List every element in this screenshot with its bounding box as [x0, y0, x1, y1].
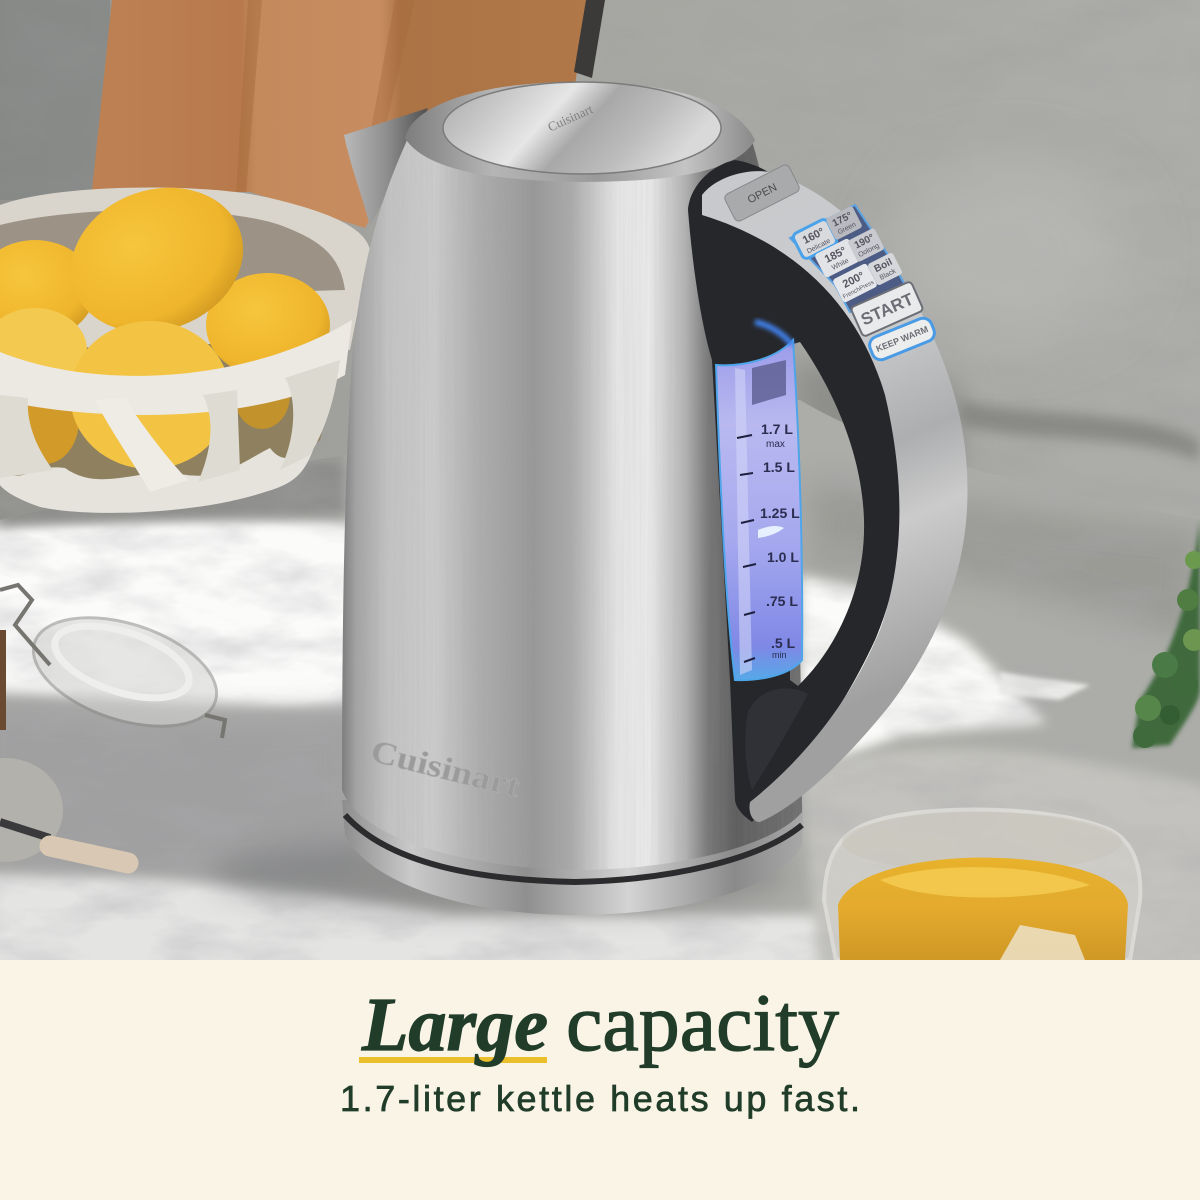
kettle shadow — [210, 837, 790, 913]
160 button: 160° — [801, 226, 827, 247]
kettle body — [342, 94, 802, 870]
175 button: Green — [837, 221, 857, 236]
capacity markings: .75 L — [766, 593, 798, 609]
lid — [443, 82, 721, 174]
lemons — [0, 164, 330, 469]
bowl back wall — [0, 188, 370, 360]
185 button: 185° — [823, 245, 849, 266]
bowl inner shadow — [14, 344, 322, 480]
boil button: Boil — [872, 257, 895, 275]
heading: capacity — [566, 977, 839, 1068]
blue glow — [755, 322, 792, 345]
175 button: 175° — [831, 210, 854, 229]
base ring — [342, 800, 803, 915]
preset panel backing — [790, 205, 905, 312]
200 button — [832, 263, 878, 303]
capacity markings: 1.0 L — [767, 549, 799, 565]
background wall — [0, 0, 1200, 560]
190 button — [847, 227, 885, 263]
capacity markings: max — [766, 439, 785, 450]
175 button — [825, 205, 863, 241]
glass tea cup — [824, 810, 1140, 960]
glass jar lid — [0, 585, 230, 747]
shoulder top — [405, 82, 755, 182]
heading: Large — [361, 983, 548, 1067]
capacity markings: 1.7 L — [761, 421, 793, 437]
handle black grip — [688, 160, 906, 822]
open button — [723, 163, 801, 223]
keep warm button — [867, 316, 937, 362]
plate and spatula — [0, 758, 128, 863]
capacity markings — [737, 421, 800, 662]
caption panel — [0, 960, 1200, 1200]
water window — [716, 340, 802, 680]
start button — [850, 281, 924, 337]
190 button: Oolong — [857, 243, 881, 259]
200 button: 200° — [841, 270, 867, 291]
start button: START — [858, 289, 917, 329]
185 button — [814, 238, 860, 278]
cutting board — [92, 0, 605, 228]
190 button: 190° — [853, 232, 876, 251]
160 button: Delicate — [806, 238, 832, 255]
control panel — [723, 163, 937, 362]
boil button — [868, 253, 902, 285]
plant sprig — [1132, 520, 1200, 748]
brushed steel texture — [340, 100, 810, 875]
bowl of lemons — [0, 164, 370, 513]
spout — [344, 108, 428, 226]
capacity markings: min — [772, 650, 787, 660]
subheading: 1.7-liter kettle heats up fast. — [340, 1078, 860, 1119]
capacity markings: 1.5 L — [763, 459, 795, 475]
160 button — [792, 218, 838, 260]
handle silver band — [702, 171, 968, 822]
bowl front lattice — [0, 320, 352, 415]
capacity markings: .5 L — [771, 635, 796, 651]
lid logo: Cuisinart — [545, 101, 595, 134]
capacity markings: 1.25 L — [760, 505, 800, 521]
boil button: Black — [879, 268, 898, 282]
kettle — [340, 82, 968, 915]
keep warm button: KEEP WARM — [874, 324, 930, 354]
handle lower grip highlight — [745, 688, 808, 790]
185 button: White — [831, 257, 850, 272]
open button: OPEN — [746, 181, 779, 206]
embossed brand: Cuisinart — [367, 732, 524, 804]
200 button: FrenchPress — [842, 280, 875, 301]
highlight underline — [359, 1057, 547, 1063]
marble countertop — [0, 400, 1200, 980]
